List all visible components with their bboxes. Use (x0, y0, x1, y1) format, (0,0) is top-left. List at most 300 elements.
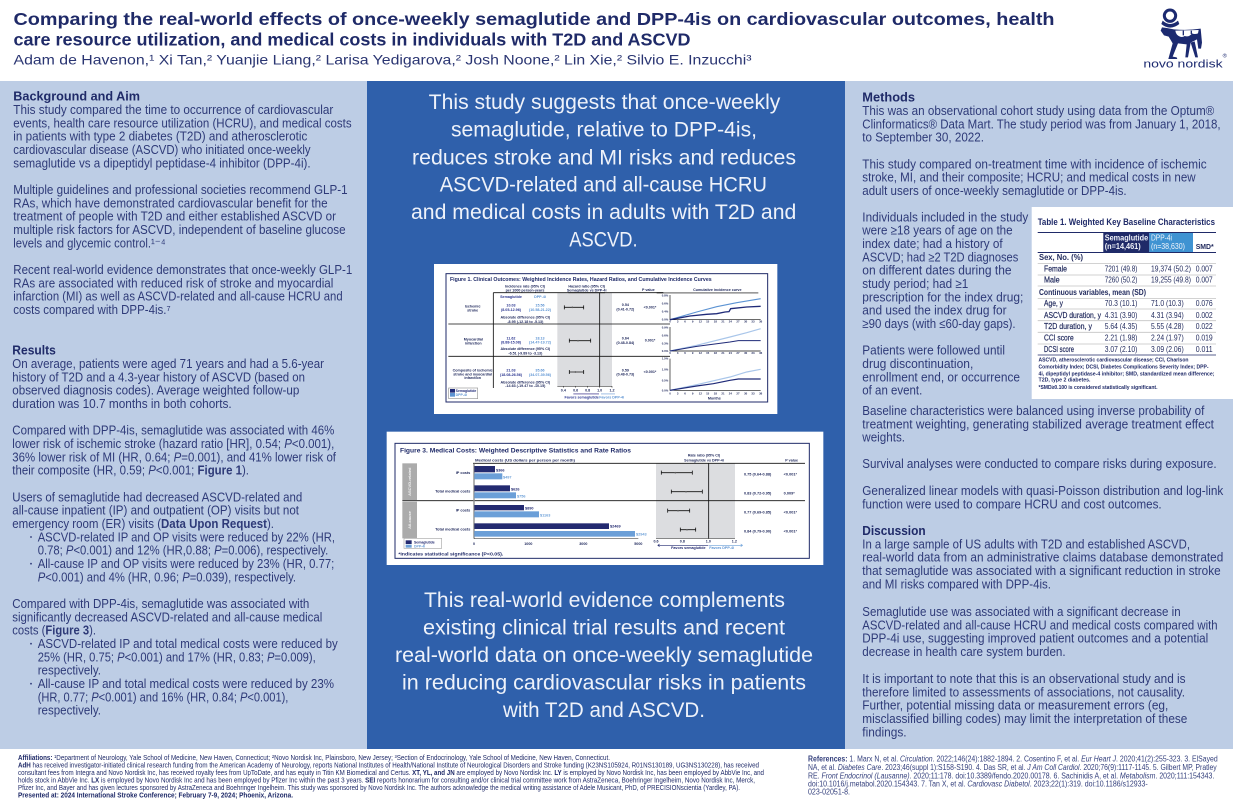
text block: methods: to September 30, 2022. (862, 131, 984, 145)
chart: figure 3 medical costs: <0.001* (784, 511, 797, 515)
footer: references: References: 1. Marx N, et al. Circulation. 2022;146(24):1882-1894. 2. Cosentino F, et al. Eur Heart J. 2020;41(2):255-323. 3. ElSayed (808, 755, 1218, 764)
chart: figure 1 clinical outcomes: Semaglutide vs DPP-4i (567, 289, 606, 293)
text block: background: Multiple guidelines and professional societies recommend GLP-1 (13, 183, 348, 197)
chart: figure 3 medical costs: 0.009* (784, 492, 795, 496)
chart: figure 1 clinical outcomes: DPP-4i (534, 295, 546, 299)
chart: figure 3 medical costs: 0.6 (653, 539, 659, 543)
heading: results: Results (12, 343, 56, 358)
chart: figure 1 clinical outcomes: 0.4% (662, 309, 669, 313)
chart: figure 1 clinical outcomes: Myocardial (464, 338, 483, 342)
callout: study suggests: and medical costs in adults with T2D and (411, 201, 796, 224)
chart: figure 3 medical costs: ASCVD-related (407, 467, 412, 496)
text block: methods: This was an observational cohort study using data from the Optum® (862, 104, 1215, 118)
chart: figure 3 medical costs: Favors DPP-4i (709, 546, 734, 550)
chart: figure 1 clinical outcomes: infarction (464, 376, 481, 380)
text block: discussion: misclassified billing codes) may limit the interpretation of these (862, 712, 1187, 726)
callout: study suggests: This study suggests that once-weekly (429, 91, 781, 114)
chart: figure 3 medical costs: Semaglutide (414, 540, 435, 544)
chart: figure 1 clinical outcomes: 0.0% (662, 388, 669, 392)
chart: figure 1 clinical outcomes: Ischemic (465, 305, 480, 309)
chart: figure 1 clinical outcomes: 0.54 (622, 303, 630, 307)
logo: novo nordisk (1143, 10, 1228, 71)
chart: figure 3 medical costs: $2469 (610, 525, 621, 529)
footer: references (808, 755, 1218, 796)
footer: references: doi:10.1016/j.metabol.2020.154343. 7. Tan X, et al. Cardiovasc Diabetol. 2023;22(1):319. doi:10.1186/s12933- (808, 780, 1148, 789)
chart: figure 3 medical costs: 0.83 (0.72-0.95) (744, 492, 772, 496)
chart: figure 1 clinical outcomes: 0.6% (662, 333, 669, 337)
text block: results: respectively. (38, 664, 101, 678)
chart: figure 3 medical costs: $497 (503, 476, 512, 480)
chart: figure 1 clinical outcomes: 21.03 (506, 368, 516, 372)
text block: results: duration was 10.7 months in both cohorts. (12, 397, 232, 411)
text block: methods: adult users of once-weekly semaglutide or DPP-4is. (862, 184, 1127, 198)
text block: results: Compared with DPP-4is, semaglutide was associated with (12, 597, 309, 611)
text block: methods: study period; had ≥1 (862, 277, 968, 291)
table 1: baseline characteristics: ASCVD, atherosclerotic cardiovascular disease; CCI, Charlson (1038, 358, 1189, 364)
text block: methods: ASCVD; had ≥2 T2D diagnoses (862, 250, 1018, 264)
chart: figure 1 clinical outcomes: 12 (699, 320, 702, 324)
chart: figure 1 clinical outcomes: 33 (751, 391, 755, 395)
chart: figure 1 clinical outcomes: (14.47-19.72) (529, 341, 552, 345)
text block: background: in patients with type 2 diabetes (T2D) and atherosclerotic (13, 130, 307, 144)
heading: methods: Methods (862, 90, 915, 105)
chart: figure 3 medical costs: 1000 (524, 542, 532, 546)
chart: figure 1 clinical outcomes: stroke (467, 309, 478, 313)
chart: figure 1 clinical outcomes: (0.48-0.84) (616, 341, 635, 345)
logo: novo nordisk: novo nordisk (1143, 59, 1223, 71)
table 1: baseline characteristics: Sex, No. (%) (1039, 252, 1083, 262)
text block: discussion: DPP-4i use, suggesting improved patient outcomes and a potential (862, 632, 1208, 646)
chart: figure 3 medical costs: 1.2 (732, 539, 737, 543)
chart: figure 1 clinical outcomes: P value (642, 288, 655, 292)
chart: figure 1 clinical outcomes: 0 (669, 391, 671, 395)
chart: figure 1 clinical outcomes: 1.0% (662, 367, 669, 371)
chart: figure 3 medical costs: 0.75 (0.64-0.88) (744, 473, 772, 477)
text block: results: emergency room (ER) visits (Data Upon Request). (12, 517, 274, 531)
chart: figure 1 clinical outcomes: 0.6 (573, 388, 578, 392)
chart: figure 1 clinical outcomes: 0.64 (622, 336, 630, 340)
table 1: baseline characteristics: 7201 (49.8) (1105, 264, 1138, 274)
chart: figure 1 clinical outcomes: Absolute difference (95% CI) (501, 347, 551, 351)
callout: real-world evidence: This real-world evidence complements (424, 589, 785, 612)
chart: figure 1 clinical outcomes: 0.6% (662, 301, 669, 305)
text block: methods: treatment weighting, generating stabilized average treatment effect (862, 417, 1214, 431)
chart: figure 1 clinical outcomes: 30 (744, 351, 748, 355)
chart: figure 1 clinical outcomes: 36 (759, 351, 763, 355)
chart: figure 1 clinical outcomes: 3 (677, 351, 679, 355)
table 1: baseline characteristics: Female (1044, 264, 1067, 274)
text block: discussion: In a large sample of US adults with T2D and established ASCVD, (862, 537, 1190, 551)
text block: background: RAs are associated with reduced risk of stroke and myocardial (13, 276, 333, 290)
table 1: baseline characteristics: Semaglutide (1105, 234, 1149, 242)
chart: figure 3 medical costs: $890 (525, 506, 534, 510)
text block: methods (861, 104, 1224, 511)
chart: figure 1 clinical outcomes: 0.4 (561, 388, 567, 392)
table 1: baseline characteristics: 2.21 (1.98) (1105, 333, 1138, 343)
footer: affiliations and disclosures: consultant fees from Integra and Novo Nordisk Inc, has received royalty fees from UpToDate, and has equity in Titin KM Biomedical and Certus. XT, YL, and JN are employed by Novo Nordisk Inc. LY is employed by Novo Nordisk Inc, has been employed by AbbVie Inc, and (18, 768, 764, 777)
chart: figure 1 clinical outcomes: 0.59 (622, 368, 629, 372)
chart: figure 3 medical costs: 0.8 (680, 539, 685, 543)
chart: figure 1 clinical outcomes: 0 (669, 351, 671, 355)
chart: figure 1 clinical outcomes: 18 (714, 351, 717, 355)
chart: figure 1 clinical outcomes: 0 (669, 320, 671, 324)
text block: discussion: findings. (862, 725, 907, 739)
chart: figure 1 clinical outcomes: 24 (729, 391, 732, 395)
chart: figure 1 clinical outcomes: 0.9% (662, 325, 669, 329)
chart: figure 3 medical costs: Figure 3. Medical Costs: Weighted Descriptive Statistics and Rate Ratios (400, 448, 631, 455)
chart: figure 1 clinical outcomes: 18 (714, 391, 717, 395)
chart: figure 1 clinical outcomes: 3 (677, 391, 679, 395)
callout: study suggests: semaglutide, relative to DPP-4is, (451, 119, 757, 142)
chart: figure 1 clinical outcomes: 24 (729, 351, 732, 355)
text block: results: 25% (HR, 0.75; P<0.001) and 17% (HR, 0.83; P=0.009), (38, 650, 316, 664)
callout: real-world evidence: real-world data on once-weekly semaglutide (395, 644, 813, 667)
chart: figure 1 clinical outcomes: 6 (684, 351, 686, 355)
chart: figure 3 medical costs: $756 (517, 495, 526, 499)
chart: figure 1 clinical outcomes: Composite of ischemic (453, 368, 493, 372)
text block: results: 36% lower risk of MI (HR, 0.64; P=0.001), and 41% lower risk of (12, 450, 336, 464)
authors: Adam de Havenon,¹ Xi Tan,² Yuanjie Liang,² Larisa Yedigarova,² Josh Noone,² Lin Xie,² Silvio E. Inzucchi³ (14, 52, 752, 68)
footer: affiliations and disclosures: AdH has received investigator-initiated clinical research funding from the American Academy of Neurology, reports National Institutes of Health/National Institute of Neurological Disorders and Stroke funding (K23NS105924, R01NS130189, UG3NS130228), has received (18, 760, 759, 770)
chart: figure 1 clinical outcomes: 33 (751, 320, 755, 324)
text block: results: (HR, 0.77; P<0.001) and 16% (HR, 0.84; P<0.001), (38, 690, 288, 704)
chart: figure 1 clinical outcomes: 9 (692, 351, 694, 355)
chart: figure 3 medical costs: 1.0 (706, 539, 711, 543)
table 1: baseline characteristics: 4.31 (3.94) (1151, 310, 1184, 320)
text block: methods: of an event. (862, 384, 922, 398)
text block: background: levels and glycemic control.¹⁻⁴ (13, 236, 166, 250)
table 1: baseline characteristics (1032, 207, 1233, 399)
chart: figure 1 clinical outcomes: 0.001* (645, 339, 656, 343)
chart: figure 1 clinical outcomes: Months (708, 397, 721, 401)
text block: discussion: Further, potential missing data or measurement errors (eg, (862, 699, 1168, 713)
chart: figure 3 medical costs: 0.77 (0.69-0.85) (744, 511, 772, 515)
chart: figure 1 clinical outcomes: 33 (751, 351, 755, 355)
text block: discussion: and MI risks compared with DPP-4is. (862, 577, 1051, 591)
table 1: baseline characteristics: 4.31 (3.90) (1105, 310, 1138, 320)
chart: figure 1 clinical outcomes: DPP-4i (456, 393, 467, 397)
table 1: baseline characteristics: 19,255 (49.8) (1151, 275, 1191, 285)
chart: figure 1 clinical outcomes: 0.3% (662, 341, 669, 345)
chart: figure 1 clinical outcomes: infarction (465, 342, 482, 346)
chart: figure 1 clinical outcomes: Figure 1. Clinical Outcomes: Weighted Incidence Rates, Hazard Ratios, and Cumulative Incidence Curves (450, 277, 712, 283)
text block: methods: function were used to compare HCRU and cost outcomes. (862, 497, 1162, 511)
panel: left background (0, 81, 367, 749)
chart: figure 1 clinical outcomes: 1.0 (597, 388, 602, 392)
chart: figure 3 medical costs: DPP-4i (414, 545, 425, 549)
table 1: baseline characteristics: 5.64 (4.35) (1105, 321, 1138, 331)
text block: discussion: decrease in health care system burden. (862, 645, 1066, 659)
chart: figure 3 medical costs: P value (785, 459, 798, 463)
chart: figure 1 clinical outcomes: 6 (684, 391, 686, 395)
chart: figure 1 clinical outcomes: <0.001* (644, 370, 657, 374)
table 1: baseline characteristics: Comorbidity Index; DCSI, Diabetes Complications Severity Index; DPP- (1038, 364, 1209, 370)
chart: figure 1 clinical outcomes: 0.5% (662, 378, 669, 382)
text block: methods: Patients were followed until (862, 344, 1005, 358)
chart: figure 1 clinical outcomes: Incidence rate (95% CI) (505, 284, 546, 288)
chart: figure 1 clinical outcomes: 12 (699, 351, 702, 355)
footer: references: RE. Front Endocrinol (Lausanne). 2020;11:178. doi:10.3389/fendo.2020.00178. 6. Sachinidis A, et al. Metabolism. 2020;111:154343. (808, 771, 1214, 780)
text block: discussion: It is important to note that this is an observational study and is (862, 672, 1186, 686)
chart: figure 1 clinical outcomes: 27 (736, 320, 740, 324)
text block: results: their composite (HR, 0.59; P<0.001; Figure 1). (12, 464, 249, 478)
table 1: baseline characteristics: 3.09 (2.06) (1151, 344, 1184, 354)
chart: figure 1 clinical outcomes: 1.2 (609, 388, 615, 392)
chart: figure 1 clinical outcomes: 18.13 (535, 336, 545, 340)
table 1: baseline characteristics: 0.002 (1196, 310, 1213, 320)
chart: figure 3 medical costs: All-cause (407, 510, 412, 529)
chart: figure 1 clinical outcomes: -8.95 (-12.18 to -5.13) (507, 320, 544, 324)
callout: real-world evidence (395, 589, 813, 722)
chart: figure 1 clinical outcomes: 15 (706, 320, 710, 324)
text block: background: costs compared with DPP-4is.⁷ (13, 303, 171, 317)
table 1: baseline characteristics: 5.55 (4.28) (1151, 321, 1184, 331)
text block: methods: index date; had a history of (862, 237, 1003, 251)
chart: figure 3 medical costs: 3000 (579, 542, 587, 546)
text block: results: ASCVD-related IP and OP visits were reduced by 22% (HR, (38, 530, 335, 544)
chart: figure 1 clinical outcomes: 36 (759, 391, 763, 395)
text block: results: costs (Figure 3). (12, 624, 96, 638)
footer: references: 023-02051-8. (808, 787, 850, 796)
table 1: baseline characteristics: *SMD≥0.100 is considered statistically significant. (1038, 385, 1158, 391)
text block: results: On average, patients were aged 71 years and had a 5.6-year (12, 357, 324, 371)
text block: results: all-cause inpatient (IP) and outpatient (OP) visits but not (12, 504, 299, 518)
chart: figure 3 medical costs: Medical costs (US dollars per person per month) (475, 459, 576, 463)
chart: figure 3 medical costs: IP costs (456, 509, 470, 513)
panel: center conclusions (367, 81, 845, 749)
chart: figure 1 clinical outcomes: (0.48-0.73) (616, 373, 635, 377)
chart: figure 1 clinical outcomes: 0.0% (662, 349, 669, 353)
table 1: baseline characteristics: SMD* (1196, 242, 1214, 251)
panel: right background (845, 81, 1233, 749)
table 1: baseline characteristics: CCI score (1044, 333, 1074, 343)
chart: figure 3 medical costs: <0.001* (784, 473, 797, 477)
title (14, 9, 1054, 50)
chart: figure 1 clinical outcomes: stroke and myocardial (453, 372, 492, 376)
table 1: baseline characteristics: 0.011 (1196, 344, 1213, 354)
table 1: baseline characteristics: 0.022 (1196, 321, 1213, 331)
callout: study suggests: ASCVD-related and all-cause HCRU (440, 174, 767, 197)
table 1: baseline characteristics: 3.07 (2.10) (1105, 344, 1138, 354)
chart: figure 1 clinical outcomes: 21 (721, 351, 725, 355)
chart: figure 1 clinical outcomes: 35.66 (535, 368, 545, 372)
chart: figure 1 clinical outcomes: 27 (736, 351, 740, 355)
table 1: baseline characteristics: 0.019 (1196, 333, 1213, 343)
chart: figure 3 medical costs: <0.001* (784, 530, 797, 534)
text block: discussion: Semaglutide use was associated with a significant decrease in (862, 605, 1181, 619)
chart: figure 1 clinical outcomes: (10.58-21.22) (529, 308, 552, 312)
chart: figure 1 clinical outcomes: 15 (706, 391, 710, 395)
callout: study suggests: ASCVD. (569, 229, 638, 252)
chart: figure 1 clinical outcomes: Hazard ratio (95% CI) (568, 284, 606, 288)
chart: figure 3 medical costs: 0.84 (0.79-0.90) (744, 530, 772, 534)
table 1: baseline characteristics: 71.0 (10.3) (1151, 298, 1184, 308)
text block: background: cardiovascular disease (ASCVD) who initiated once-weekly (13, 143, 311, 157)
callout: study suggests (411, 91, 796, 252)
text block: methods: were ≥18 years of age on the (861, 224, 1013, 238)
chart: figure 3 medical costs: $626 (511, 487, 520, 491)
text block: methods: Baseline characteristics were balanced using inverse probability of (862, 404, 1205, 418)
text block: background: RAs, which have demonstrated cardiovascular benefit for the (13, 196, 328, 210)
footer: affiliations and disclosures: Presented at: 2024 International Stroke Conference; February 7-9, 2024; Phoenix, Arizona. (18, 790, 293, 800)
table 1: baseline characteristics: (n=38,630) (1151, 242, 1185, 251)
chart: figure 1 clinical outcomes: (34.07-39.56) (529, 373, 552, 377)
table 1: baseline characteristics: DCSI score (1044, 344, 1074, 354)
chart: figure 1 clinical outcomes: Favors semaglutide (564, 396, 599, 400)
text block: discussion: therefore limited to assessments of associations, not causality. (862, 685, 1185, 699)
chart: figure 1 clinical outcomes: (8.05-12.96) (501, 308, 522, 312)
text block: results: observed diagnosis codes). Average weighted follow-up (12, 384, 299, 398)
text block: results: history of T2D and a 4.3-year history of ASCVD (based on (12, 370, 305, 384)
chart: figure 1 clinical outcomes: <0.001* (644, 305, 657, 309)
text block: methods: prescription for the index drug; (862, 290, 1023, 304)
table 1: baseline characteristics: ASCVD duration, y (1044, 310, 1102, 320)
chart: figure 3 medical costs: Rate ratio (95% CI) (688, 454, 721, 458)
chart: figure 1 clinical outcomes: 21 (721, 391, 725, 395)
chart: figure 1 clinical outcomes: 15 (706, 351, 710, 355)
text block: methods: enrollment end, or occurrence (862, 370, 1020, 384)
chart: figure 1 clinical outcomes: 0.8 (585, 388, 590, 392)
chart: figure 3 medical costs: $1163 (540, 514, 550, 518)
chart: figure 1 clinical outcomes: 12 (699, 391, 702, 395)
callout: real-world evidence: with T2D and ASCVD. (502, 699, 705, 722)
chart: figure 1 clinical outcomes: 3 (677, 320, 679, 324)
text block: methods: and used the index drug for (862, 304, 1007, 318)
text block: results: Compared with DPP-4is, semaglutide was associated with 46% (12, 424, 334, 438)
callout: real-world evidence: in reducing cardiovascular risks in patients (402, 672, 806, 694)
text block: background: events, health care resource utilization (HCRU), and medical costs (13, 116, 352, 130)
chart: figure 1 clinical outcomes: 30 (744, 391, 748, 395)
table 1: baseline characteristics: T2D, type 2 diabetes. (1038, 378, 1091, 384)
text block: results: Users of semaglutide had decreased ASCVD-related and (12, 490, 302, 504)
chart: figure 1 clinical outcomes: (0.41-0.72) (616, 308, 635, 312)
text block: methods: on different dates during the (862, 264, 1012, 278)
text block: methods: Individuals included in the study (862, 210, 1029, 224)
chart: figure 3 medical costs: 0 (473, 542, 475, 546)
chart: figure 3 medical costs: Total medical costs (435, 490, 470, 494)
chart: figure 1 clinical outcomes: 6 (684, 320, 686, 324)
chart: figure 1 clinical outcomes: Semaglutide (500, 295, 522, 299)
footer: affiliations and disclosures (18, 753, 764, 800)
chart: figure 1 clinical outcomes: 10.03 (506, 304, 516, 308)
chart: figure 3 medical costs: *Indicates statistical significance (P<0.05). (398, 551, 503, 556)
heading: discussion: Discussion (862, 523, 926, 538)
text block: results: respectively. (38, 704, 101, 718)
chart: figure 3 medical costs: $366 (496, 468, 505, 472)
table 1: baseline characteristics: 4i, dipeptidyl peptidase-4 inhibitor; SMD, standardized mean difference; (1038, 372, 1215, 378)
chart: figure 1 clinical outcomes: (8.88-15.08) (501, 341, 522, 345)
chart: figure 3 medical costs: 5000 (634, 542, 642, 546)
chart: figure 3 medical costs: Total medical costs (435, 528, 470, 532)
chart: figure 1 clinical outcomes: 24 (729, 320, 732, 324)
footer: affiliations and disclosures: Affiliations: ¹Department of Neurology, Yale School of Medicine, New Haven, Connecticut; ²Novo Nordisk Inc, Plainsboro, New Jersey; ³Section of Endocrinology, Yale School of Medicine, New Haven, Connecticut. (18, 753, 610, 762)
text block: methods: This study compared on-treatment time with incidence of ischemic (862, 157, 1207, 171)
chart: figure 1 clinical outcomes: 18 (714, 320, 717, 324)
text block: methods: ≥90 days (with ≤60-day gaps). (862, 317, 1016, 331)
text block: results: ASCVD-related IP and total medical costs were reduced by (38, 637, 338, 651)
chart: figure 3 medical costs: Favors semaglutide (671, 546, 706, 550)
text block: background: semaglutide vs a dipeptidyl peptidase-4 inhibitor (DPP-4i). (13, 156, 311, 170)
chart: figure 1 clinical outcomes: 9 (692, 391, 694, 395)
text block: results (12, 357, 338, 718)
chart: figure 1 clinical outcomes: -6.51 (-9.89 to -3.13) (508, 351, 543, 355)
footer: affiliations and disclosures: holds stock in AbbVie Inc. LX is employed by Novo Nordisk Inc and has been employed by Pfizer Inc within the past 3 years. SEI reports honorarium for consulting and/or clinical trial committee work from AstraZeneca, Boehringer Ingelheim, Novo Nordisk Inc, Merck, (18, 776, 755, 785)
chart: figure 1 clinical outcomes: Favors DPP-4i (599, 396, 624, 400)
table 1: baseline characteristics: 7260 (50.2) (1105, 275, 1138, 285)
text block: background: treatment of people with T2D and either established ASCVD or (13, 210, 336, 224)
chart: figure 1 clinical outcomes: 9 (692, 320, 694, 324)
callout: real-world evidence: existing clinical trial results and recent (423, 616, 785, 640)
logo: novo nordisk: ® (1223, 52, 1228, 59)
callout: study suggests: reduces stroke and MI risks and reduces (412, 146, 796, 169)
text block: results: All-cause IP and OP visits were reduced by 23% (HR, 0.77; (38, 557, 334, 571)
table 1: baseline characteristics: 0.007 (1196, 264, 1213, 274)
table 1: baseline characteristics: (n=14,461) (1105, 242, 1141, 251)
text block: methods: drug discontinuation, (862, 357, 973, 371)
heading: background and aim: Background and Aim (13, 89, 140, 104)
chart: figure 1 clinical outcomes: 36 (759, 320, 763, 324)
chart: figure 1 clinical outcomes: Absolute difference (95% CI) (501, 380, 551, 384)
text block: methods: weights. (861, 431, 905, 445)
table 1: baseline characteristics: Age, y (1044, 298, 1064, 308)
chart: figure 1 clinical outcomes: 21 (721, 320, 725, 324)
table 1: baseline characteristics: 2.24 (1.97) (1151, 333, 1184, 343)
table 1: baseline characteristics: Male (1044, 275, 1060, 285)
text block: discussion (862, 537, 1223, 739)
table 1: baseline characteristics: 0.076 (1196, 298, 1213, 308)
table 1: baseline characteristics: T2D duration, y (1044, 321, 1093, 331)
chart: figure 1 clinical outcomes: per 1000 person-years (506, 289, 544, 293)
chart: figure 1 clinical outcomes: Cumulative incidence curve (693, 288, 742, 292)
chart: figure 1 clinical outcomes: 27 (736, 391, 740, 395)
text block: background: infarction (MI) as well as ASCVD-related and all-cause HCRU and (13, 290, 343, 304)
chart: figure 1 clinical outcomes: Absolute difference (95% CI) (501, 316, 551, 320)
text block: results: 0.78; P<0.001) and 12% (HR,0.88; P=0.006), respectively. (38, 544, 328, 558)
text block: results: significantly decreased ASCVD-related and all-cause medical (12, 610, 322, 624)
text block: background (13, 103, 352, 317)
text block: results: P<0.001) and 4% (HR, 0.96; P=0.039), respectively. (38, 570, 296, 584)
chart: figure 3 medical costs: $2943 (636, 533, 647, 537)
chart: figure 1 clinical outcomes: 30 (744, 320, 748, 324)
text block: background: Recent real-world evidence demonstrates that once-weekly GLP-1 (13, 263, 352, 277)
chart: figure 1 clinical outcomes: 1.5% (662, 357, 669, 361)
text block: background: multiple risk factors for ASCVD, independent of baseline glucose (13, 223, 346, 237)
table 1: baseline characteristics: DPP-4i (1151, 234, 1172, 242)
table 1: baseline characteristics: 0.007 (1196, 275, 1213, 285)
title: care resource utilization, and medical costs in individuals with T2D and ASCVD (14, 30, 691, 50)
table 1: baseline characteristics: 19,374 (50.2) (1151, 264, 1191, 274)
chart: figure 1 clinical outcomes: (18.08-26.56) (500, 373, 523, 377)
chart: figure 1 clinical outcomes: 0.0% (662, 318, 669, 322)
chart: figure 1 clinical outcomes: 0.8% (662, 293, 669, 297)
chart: figure 1 clinical outcomes: -14.63 (-19.47 to -10.15) (505, 384, 546, 388)
text block: results: lower risk of ischemic stroke (hazard ratio [HR], 0.54; P<0.001), (12, 437, 334, 451)
text block: background: This study compared the time to occurrence of cardiovascular (13, 103, 333, 117)
chart: figure 1 clinical outcomes (434, 264, 777, 414)
title: Comparing the real-world effects of once-weekly semaglutide and DPP-4is on cardiovascular outcomes, health (14, 9, 1054, 29)
chart: figure 3 medical costs: IP costs (456, 471, 470, 475)
text block: results: All-cause IP and total medical costs were reduced by 23% (38, 677, 334, 691)
chart: figure 1 clinical outcomes: Semaglutide (456, 389, 476, 393)
chart: figure 1 clinical outcomes: 15.56 (535, 304, 545, 308)
table 1: baseline characteristics: Continuous variables, mean (SD) (1039, 287, 1146, 297)
chart: figure 1 clinical outcomes: 11.62 (507, 336, 515, 340)
footer: affiliations and disclosures: Pfizer Inc, and Bayer and has given lectures sponsored by AstraZeneca and Boehringer Ingelheim. This study was sponsored by Novo Nordisk Inc. The authors acknowledge the medical writing assistance of Adele Musicant, PhD, of PRECISIONscientia (Yardley, PA). (18, 783, 740, 792)
chart: figure 3 medical costs (387, 432, 823, 565)
table 1: baseline characteristics: 70.3 (10.1) (1105, 298, 1138, 308)
footer: references: NA, et al. Diabetes Care. 2023;46(suppl 1):S158-S190. 4. Das SR, et al. J Am Coll Cardiol. 2020;76(9):1117-1145. 5. Gilbert MP, Pratley (808, 763, 1217, 772)
chart: figure 3 medical costs: Semaglutide vs DPP-4i (684, 459, 724, 463)
